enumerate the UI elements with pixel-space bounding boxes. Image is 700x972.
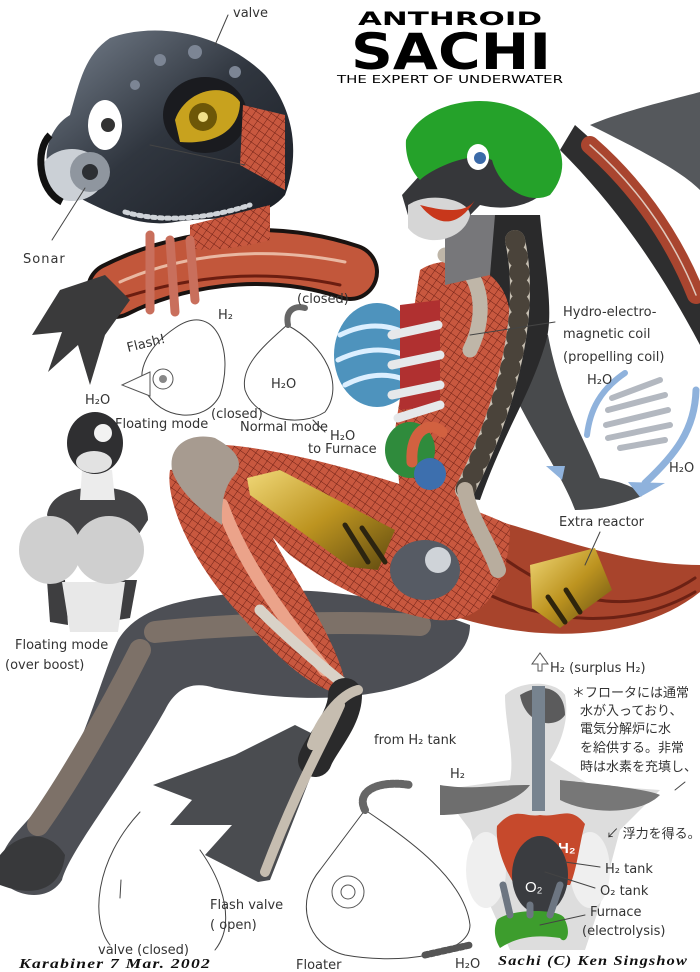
- panel: floating mode over boost: Floating mode: [15, 638, 108, 653]
- annotation: japanese note: [572, 685, 700, 841]
- diagram: floater in normal mode: [240, 292, 377, 457]
- diagram: floater with flash valve: Flash valve: [210, 898, 283, 913]
- labels: tanks and furnace: (electrolysis): [582, 924, 665, 939]
- knee joint: [390, 540, 460, 600]
- tail reactor: [530, 548, 612, 628]
- annotation: japanese note: ↙ 浮力を得る。: [606, 826, 700, 841]
- net torso: [395, 262, 510, 510]
- hand: [32, 275, 130, 385]
- lower spine: [465, 490, 498, 570]
- thigh muscle: [225, 445, 510, 620]
- diagram: propelling coil: H₂O: [587, 373, 612, 388]
- shin bone shadow: [38, 650, 140, 825]
- far leg, grey skin: [0, 590, 470, 895]
- stump foot: [0, 836, 65, 891]
- panel: floating mode over boost: [5, 412, 148, 673]
- organs: [385, 422, 435, 478]
- back and dark flank: [440, 215, 549, 500]
- head: [402, 114, 555, 238]
- diagram: floater in floating mode: H₂: [218, 308, 233, 323]
- diagram: floater in floating mode: H₂O: [85, 393, 110, 408]
- diagram: floater with flash valve: [210, 733, 480, 972]
- label: extra reactor: Extra reactor: [559, 515, 645, 530]
- label: surplus H2: [532, 653, 646, 676]
- label: sonar: Sonar: [23, 252, 66, 267]
- annotation: japanese note: 水が入っており、: [580, 703, 682, 718]
- diagram: floater in floating mode: Floating mode: [115, 417, 208, 432]
- labels: tanks and furnace: H₂ tank: [605, 862, 653, 877]
- pelvic bone: [445, 255, 480, 350]
- thigh bone shadow: [155, 623, 420, 632]
- labels: tanks and furnace: [540, 862, 665, 939]
- yellow thigh cylinder: [247, 470, 395, 570]
- air rod: [532, 686, 545, 811]
- diagram: torso with tanks: [440, 684, 660, 950]
- diagram: floater closed valve: valve (closed): [98, 943, 189, 958]
- furnace: [495, 911, 568, 948]
- label: extra reactor: [559, 515, 645, 565]
- label: hydro-electro-magnetic coil: magnetic coil: [563, 327, 650, 342]
- heel: [315, 695, 345, 760]
- icon: android skull: [40, 30, 293, 312]
- foot bones: [265, 690, 358, 872]
- H2 tank: [497, 813, 585, 885]
- tail: [450, 515, 700, 634]
- diagram: floater in normal mode: (closed): [297, 292, 349, 307]
- labels: tanks and furnace: Furnace: [590, 905, 641, 920]
- signature right: Sachi (C) Ken Singshow: [498, 954, 688, 969]
- shin muscle: [169, 460, 345, 695]
- rear arm: [510, 310, 642, 510]
- label: hydro-electro-magnetic coil: Hydro-electro-: [563, 305, 657, 320]
- label: surplus H2: H₂ (surplus H₂): [550, 661, 646, 676]
- diagram: floater with flash valve: H₂O: [455, 957, 480, 972]
- diagram: torso with tanks: H₂: [558, 840, 576, 857]
- diagram: floater in floating mode: Flash!: [125, 332, 167, 356]
- label: valve: [215, 6, 268, 45]
- diagram: floater closed valve: [98, 812, 226, 958]
- title: [336, 8, 563, 86]
- diagram: floater with flash valve: H₂: [450, 767, 465, 782]
- webbed foot: [153, 725, 325, 882]
- diagram: propelling coil: [546, 373, 696, 497]
- near arm: [115, 257, 350, 290]
- diagram: floater in floating mode: [85, 308, 263, 432]
- title: SACHI: [351, 23, 551, 81]
- label: sonar: [23, 188, 85, 267]
- chest coil: [334, 303, 420, 407]
- diagram: torso with tanks: O₂: [525, 879, 543, 896]
- annotation: japanese note: ＊フロータには通常: [572, 685, 689, 700]
- annotation: japanese note: 電気分解炉に水: [580, 721, 671, 736]
- diagram: floater with flash valve: ( open): [210, 918, 257, 933]
- annotation: japanese note: を給供する。非常: [580, 740, 684, 755]
- panel: floating mode over boost: (over boost): [5, 658, 84, 673]
- diagram: floater in normal mode: Normal mode: [240, 420, 328, 435]
- label: hydro-electro-magnetic coil: (propelling coil): [563, 350, 664, 365]
- diagram: floater in normal mode: to Furnace: [308, 442, 377, 457]
- knee bone: [172, 437, 239, 525]
- label: valve: valve: [233, 6, 268, 21]
- diagram: floater with flash valve: from H₂ tank: [374, 733, 457, 748]
- title: THE EXPERT OF UNDERWATER: [336, 74, 563, 86]
- tail fluke, upper right: [560, 92, 700, 345]
- label: hydro-electro-magnetic coil: [470, 305, 664, 365]
- signature left: Karabiner 7 Mar. 2002: [18, 957, 211, 972]
- leg lower bone: [260, 610, 345, 685]
- labels: tanks and furnace: O₂ tank: [600, 884, 649, 899]
- neck: [445, 215, 495, 285]
- annotation: japanese note: 時は水素を充填し、: [580, 759, 697, 774]
- diagram: floater in floating mode: (closed): [211, 407, 263, 422]
- title: ANTHROID: [358, 8, 542, 30]
- diagram: floater in normal mode: H₂O: [330, 429, 355, 444]
- diagram: floater in normal mode: H₂O: [271, 377, 296, 392]
- diagram: propelling coil: H₂O: [669, 461, 694, 476]
- spine: [465, 240, 520, 490]
- O2 tank: [512, 836, 568, 914]
